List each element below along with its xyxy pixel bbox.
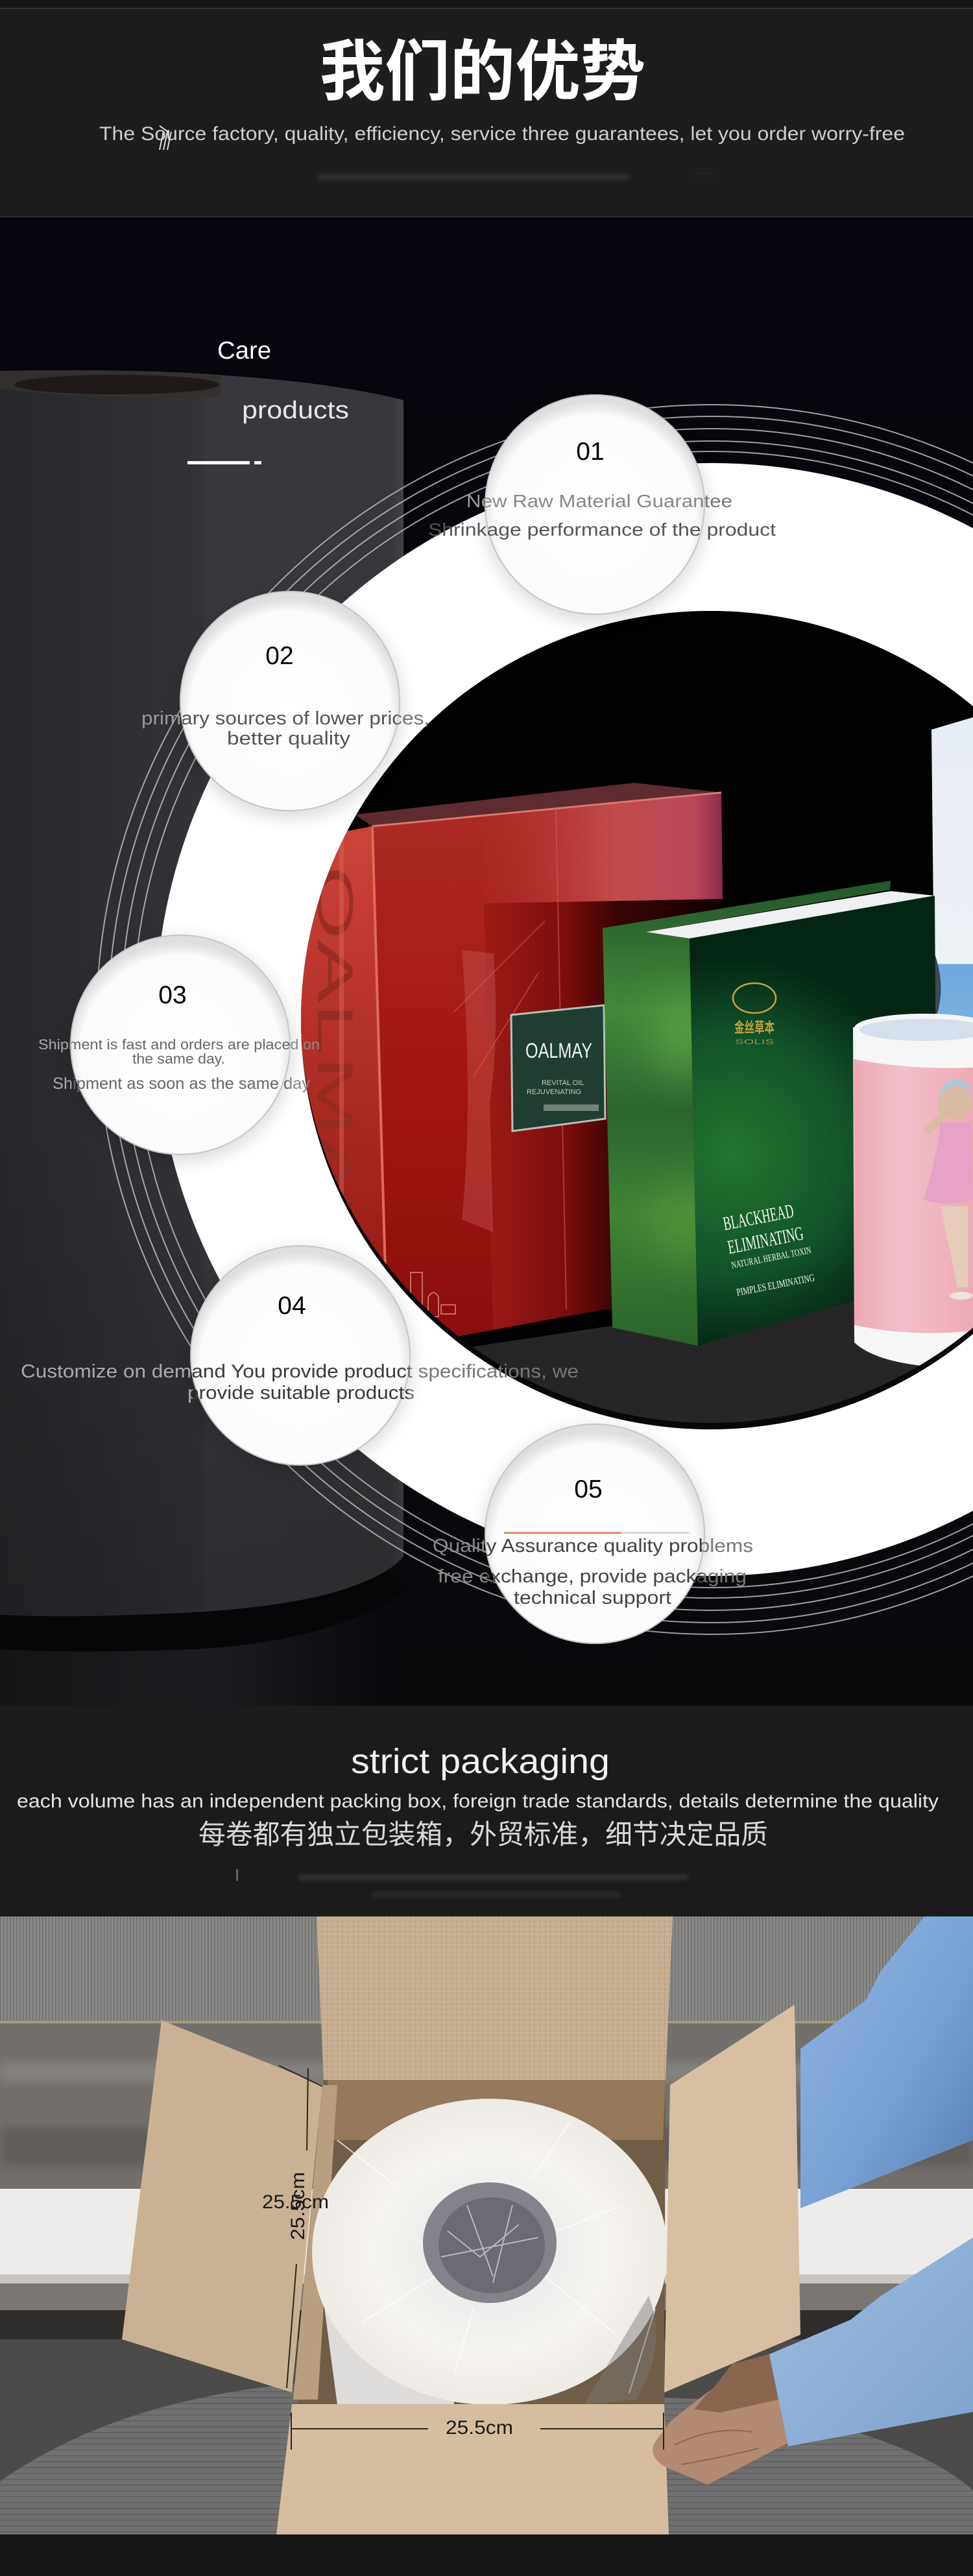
lens 01: New Raw Material Guarantee [466,491,732,511]
green box [603,881,937,1346]
film roll [312,2099,667,2405]
panel: header band [0,0,973,218]
lens 03: 03 [158,981,187,1009]
lens 02: primary sources of lower prices, [141,708,429,729]
green box text: NATURAL HERBAL TOXIN [730,1245,812,1271]
left caption [187,337,349,464]
dimension: side [262,2066,329,2388]
left caption: products [242,397,349,424]
dimension: bottom: 25.5cm [446,2417,513,2439]
left caption: Care [217,337,271,364]
green box text: PIMPLES ELIMINATING [736,1272,815,1298]
product roll [0,370,409,1706]
panel: strict packaging [0,1706,973,1916]
small glitch mark [160,126,171,150]
red box [285,783,723,1337]
lens 03: Shipment as soon as the same day [53,1075,310,1093]
round table [0,2383,973,2534]
green box text: BLACKHEAD [721,1200,795,1235]
lens 04 [21,1246,579,1472]
arm lower sleeve [769,2237,973,2446]
lens 03 [38,935,320,1162]
carton left flap [122,2020,322,2392]
concentric rings [97,405,973,1634]
carton front flap [276,2404,669,2534]
red box: OALMAY [307,866,364,1255]
carton interior [293,2080,666,2405]
red box: REJUVENATING [527,1088,581,1096]
lens 01: Shrinkage performance of the product [428,519,776,540]
Chinese description: 每卷都有独立包装箱，外贸标准，细节决定品质 [198,1813,768,1852]
dimension: side: 25.5cm [287,2172,309,2240]
dimension: bottom [291,2413,664,2450]
hand [653,2354,791,2485]
lens 02: 02 [265,642,294,670]
lens 03: Shipment is fast and orders are placed on [38,1036,320,1053]
green box text [721,1199,817,1298]
blue box [931,717,973,1038]
lens 05: 05 [574,1475,603,1503]
title: 我们的优势 [320,19,645,114]
illustrated girl [923,1079,973,1300]
lens 01 [428,395,776,621]
photo: opened carton with roll [0,1916,973,2534]
lens 04: 04 [278,1292,306,1320]
dimension: side: 25.5cm [262,2191,329,2213]
red box: OALMAY [525,1039,592,1062]
carton back flap [317,1916,673,2080]
English description: each volume has an independent packing box, foreign trade standards, details determine the quality [17,1791,939,1812]
roll core [423,2182,557,2303]
gold logo [733,983,776,1013]
lens 02 [141,591,429,818]
lens 05: technical support [514,1588,671,1608]
red box label [511,1005,605,1131]
white ring [155,463,973,1576]
carton right flap [664,2005,800,2392]
background room [0,1916,973,2534]
photo: packaged products [285,603,973,1440]
faded text lines [298,1874,688,1898]
lens 03: the same day. [132,1051,225,1067]
green box text: ELIMINATING [726,1222,805,1258]
lens 04: provide suitable products [187,1383,414,1403]
red box: REVITAL OIL [542,1079,584,1087]
shelf [472,1300,961,1423]
lens 02: better quality [227,728,351,749]
lens 05: free exchange, provide packaging [438,1566,747,1587]
footer band [0,2534,973,2576]
lens 01: 01 [576,438,605,466]
lens 05 [433,1424,753,1651]
green box: 金丝草本 [734,1020,775,1036]
green box: SOLIS [735,1038,774,1046]
heading: strict packaging [351,1742,610,1781]
arm upper sleeve [800,1916,973,2208]
small outline icons [411,1272,455,1317]
lens 04: Customize on demand You provide product specifications, we [21,1361,579,1382]
panel: advantages section [0,217,973,1706]
faded text line [318,174,720,180]
lens 05: Quality Assurance quality problems [433,1536,753,1556]
shrink wrap creases [337,2121,655,2393]
pink cylinder [853,1014,973,1368]
subtitle: The Source factory, quality, efficiency, service three guarantees, let you order worry-free [99,123,905,145]
